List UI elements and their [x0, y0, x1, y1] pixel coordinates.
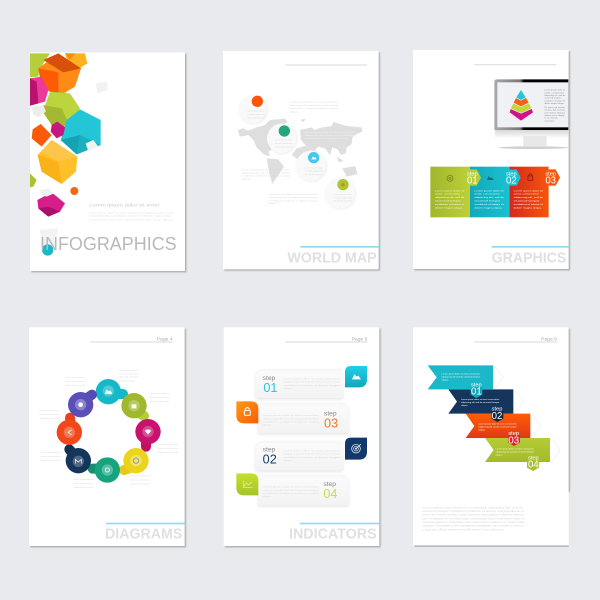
segment: lime — [121, 393, 147, 418]
illustration: colourful cubes — [30, 53, 107, 256]
chart: three step blocks — [430, 167, 560, 217]
icon: target — [345, 438, 367, 460]
text block: top note — [289, 101, 339, 113]
card: step 01: incididunt ut labore et dolore magna — [283, 384, 341, 387]
card: step 03: adipiscing elit sed do eiusmod tempor — [263, 417, 320, 420]
text block: cover intro: Lorem ipsum dolor sit amet, consectetur adipiscing elit sed do — [89, 211, 174, 214]
banner: step 02: Lorem ipsum dolor sit amet consectetur — [461, 398, 500, 401]
banner: step 01: 01 — [471, 386, 482, 397]
heading: lorem ipsum: Lorem ipsum dolor sit amet — [89, 203, 160, 209]
card: step 04: step — [323, 481, 336, 488]
panel: indicators — [224, 327, 381, 547]
card: step 04: 04 — [323, 487, 337, 501]
text block: page 6 paragraph: reprehenderit in voluptate velit esse cillum dolore eu fugiat nulla — [422, 520, 525, 524]
text block: map note: adipiscing elit sed do eiusmod tempor — [305, 134, 355, 137]
title: world map: WORLD MAP — [287, 250, 377, 266]
text block: top note: aliqua — [289, 111, 299, 113]
text block: monitor copy: veniam, quis nostrud — [544, 109, 565, 112]
text block: top note: Lorem ipsum dolor sit amet consectetur — [289, 101, 339, 104]
text block: monitor copy: Ut enim ad minim — [544, 106, 565, 109]
callout: orange marker: elit sed do eiusmod — [247, 116, 265, 119]
text block: diagram notes: amet consectetur — [39, 413, 60, 416]
text block: diagram notes: Lorem ipsum dolor sit — [130, 475, 150, 478]
text block: diagram notes: adipiscing elit sed do — [73, 486, 94, 489]
text block: monitor copy: ex ea commodo — [544, 118, 558, 120]
banner: step 03: adipiscing elit sed do eiusmod tempor — [478, 425, 517, 428]
text block: diagram notes: amet consectetur — [149, 396, 170, 399]
text block: page 6 paragraph: nisi ut aliquip ex ea commodo consequat. Duis aute irure dolor in — [422, 516, 525, 520]
banner: step 03: aliqua — [478, 429, 486, 431]
callout: lime marker: elit sed do eiusmod — [333, 200, 353, 203]
banner: step 04: aliqua — [496, 454, 503, 456]
text block: diagram notes — [39, 369, 179, 489]
text block: step 02 copy: dolore magna aliqua. — [474, 207, 503, 210]
segment: magenta — [135, 419, 161, 447]
card: step 02: incididunt ut labore et dolore magna — [283, 456, 341, 459]
icon: people — [345, 366, 367, 387]
text block: diagram notes: amet consectetur — [41, 455, 61, 458]
banner: step 04: adipiscing elit sed do eiusmod tempor — [496, 450, 534, 453]
title: graphics: GRAPHICS — [492, 250, 567, 266]
text block: monitor copy: Lorem ipsum dolor sit — [544, 89, 565, 92]
icon: chart — [236, 473, 258, 495]
banner: step 04 — [485, 438, 550, 471]
card: step 01: aliqua — [283, 388, 293, 390]
banner: step 03: 03 — [508, 435, 519, 446]
panel: diagrams — [29, 327, 186, 547]
chart: circular diagram — [57, 379, 161, 483]
chart: pyramid — [510, 90, 533, 121]
banner: step 04: 04 — [528, 460, 539, 471]
icon: lock — [528, 174, 533, 180]
text block: left note: aliqua — [241, 178, 251, 180]
text block: top note: adipiscing elit sed do eiusmod tempor — [289, 104, 339, 107]
segment: red — [57, 418, 82, 445]
text block: step 03 copy: adipiscing elit, sed do — [514, 196, 544, 199]
text block: diagram notes: adipiscing elit sed do — [149, 400, 170, 403]
card: step 02: 02 — [263, 453, 277, 467]
icon: lock — [236, 401, 258, 423]
text block: diagram notes: Lorem ipsum dolor sit — [119, 369, 139, 372]
callout: green marker: Lorem ipsum dolor — [275, 139, 293, 142]
segment: green — [93, 457, 120, 483]
text block: diagram notes: Lorem ipsum dolor sit — [39, 409, 60, 412]
text block: diagram notes: eiusmod tempor — [119, 380, 136, 383]
text block: step 01 copy: eiusmod tempor — [435, 199, 461, 202]
card: step 01: adipiscing elit sed do eiusmod tempor — [283, 381, 340, 384]
text block: diagram notes: Lorem ipsum dolor sit — [149, 392, 170, 395]
label: step 02: 02 — [506, 175, 517, 186]
card: step 01: 01 — [263, 381, 277, 395]
banner: step 02: 02 — [492, 411, 502, 422]
segment: teal — [96, 379, 123, 404]
title: diagrams: DIAGRAMS — [105, 526, 183, 542]
text block: diagram notes: adipiscing elit sed do — [39, 417, 60, 420]
text block: diagram notes: Lorem ipsum dolor sit — [41, 451, 61, 454]
card: step 02 — [256, 443, 344, 472]
banner: step 04: Lorem ipsum dolor sit amet consectetur — [496, 447, 534, 450]
panel: infographics cover — [30, 52, 186, 272]
text block: diagram notes: adipiscing elit sed do — [119, 376, 139, 379]
banner: step 01: step — [471, 382, 482, 388]
text block: step 02 copy: adipiscing elit, sed do — [474, 196, 505, 199]
callout: blue marker — [296, 151, 327, 181]
callout: lime marker — [325, 178, 356, 209]
callout: lime marker: Lorem ipsum dolor — [333, 193, 352, 196]
text block: left note: adipiscing elit sed do eiusmod tempor — [241, 172, 291, 175]
card: step 02: Lorem ipsum dolor sit amet consectetur — [283, 449, 340, 452]
card: step 03 — [258, 404, 348, 434]
banner: step 03: Lorem ipsum dolor sit amet consectetur — [478, 422, 517, 425]
illustration: desktop monitor with pyramid — [494, 79, 568, 149]
text block: page 6 paragraph: eiusmod tempor incididunt ut labore et dolore magna aliqua ut — [422, 509, 524, 513]
card: step 02: adipiscing elit sed do eiusmod tempor — [283, 453, 340, 456]
text block: monitor copy: consequat — [544, 119, 555, 122]
text block: diagram notes: Lorem ipsum dolor sit — [73, 478, 94, 481]
segment: navy — [66, 448, 91, 473]
callout: blue marker: elit sed do eiusmod — [304, 173, 324, 176]
text block: bottom note: Lorem ipsum dolor sit amet consectetur — [268, 193, 319, 196]
icon: target — [447, 175, 453, 181]
text block: step 03 copy: amet, consectetur — [514, 193, 539, 196]
text block: monitor copy: incididunt ut labore et — [544, 99, 565, 102]
text block: diagram notes: amet consectetur — [119, 372, 139, 375]
text block: page 6 paragraph: Lorem ipsum dolor sit amet, consectetur adipiscing elit, sed do — [422, 506, 524, 510]
text block: diagram notes: adipiscing elit sed do — [41, 459, 61, 462]
text block: step 01 copy: amet, consectetur — [435, 193, 461, 196]
icon: people — [487, 176, 494, 180]
callout: lime marker: sit amet adipiscing — [333, 196, 353, 199]
text block: left note: incididunt ut labore et dolore magna — [241, 175, 291, 178]
text block: top note: incididunt ut labore et dolore magna — [289, 107, 339, 110]
card: step 02: aliqua — [283, 460, 293, 462]
card: step 03: 03 — [324, 416, 338, 430]
text block: bottom note: aliqua — [268, 203, 278, 205]
text block: monitor copy: adipiscing elit, sed do — [544, 94, 566, 97]
panel: world map — [223, 51, 380, 271]
banner: step 02: step — [492, 407, 502, 413]
card: step 04: Lorem ipsum dolor sit amet consectetur — [263, 486, 320, 489]
card: step 03: incididunt ut labore et dolore magna — [263, 421, 321, 424]
text block: map note: Lorem ipsum dolor sit amet consectetur — [305, 131, 355, 134]
text block: step 02 copy: incididunt ut labore et — [474, 203, 504, 206]
text block: diagram notes: adipiscing elit sed do — [158, 451, 179, 454]
text block: step 01 copy: incididunt ut labore et — [435, 203, 465, 206]
card: step 03: step — [324, 411, 337, 418]
text block: monitor copy: dolore magna aliqua. — [544, 102, 565, 105]
callout: green marker — [267, 124, 297, 154]
callout: orange marker — [239, 95, 267, 124]
segment: yellow — [123, 448, 149, 473]
banner: step 01: Lorem ipsum dolor sit amet consectetur — [442, 372, 480, 375]
callout: green marker: elit sed do eiusmod — [275, 145, 293, 148]
banner: step 02: adipiscing elit sed do eiusmod tempor — [461, 401, 500, 404]
text block: monitor copy: exercitation ullamco — [544, 111, 566, 114]
banner: step 01 — [428, 365, 493, 398]
text block: diagram notes: Lorem ipsum dolor sit — [65, 376, 86, 379]
title: infographics: INFOGRAPHICS — [40, 233, 177, 254]
text block: step 03 copy — [514, 189, 544, 210]
label: page 6: Page 6 — [541, 336, 557, 341]
label: step 01: 01 — [467, 175, 478, 186]
text block: bottom note: adipiscing elit sed do eiusmod tempor — [268, 196, 319, 199]
panel: stepped banners — [413, 327, 570, 547]
text block: monitor copy: amet, consectetur — [544, 91, 565, 94]
card: step 01 — [256, 371, 344, 399]
segment: purple — [68, 392, 93, 417]
text block: diagram notes: amet consectetur — [65, 380, 86, 383]
text block: bottom note: incididunt ut labore et dolore magna — [268, 199, 319, 202]
text block: diagram notes: Lorem ipsum dolor sit — [158, 443, 178, 446]
label: step 03: step — [545, 171, 556, 177]
banner: step 02: aliqua — [461, 405, 469, 407]
card: step 04: aliqua — [263, 496, 273, 498]
callout: blue marker: sit amet adipiscing — [304, 170, 324, 173]
callout: green marker: sit amet adipiscing — [275, 142, 293, 145]
text block: diagram notes: amet consectetur — [73, 482, 94, 485]
text block: monitor copy: eiusmod tempor — [544, 97, 561, 100]
text block: step 01 copy — [435, 189, 465, 210]
text block: step 02 copy — [474, 189, 505, 210]
decorative chevrons — [495, 367, 560, 461]
text block: diagram notes: amet consectetur — [158, 447, 178, 450]
text block: step 03 copy: dolore magna aliqua. — [514, 207, 542, 210]
text block: diagram notes: amet consectetur — [130, 479, 150, 482]
card: step 04 — [258, 476, 348, 507]
text block: bottom note — [268, 193, 319, 205]
text block: monitor copy — [544, 89, 566, 122]
callout: blue marker: Lorem ipsum dolor — [304, 166, 323, 169]
chart: world map shapes — [238, 119, 362, 184]
label: page 4: Page 4 — [157, 336, 173, 341]
text block: monitor copy: laboris nisi ut aliquip — [544, 114, 565, 117]
text block: left note: Lorem ipsum dolor sit amet consectetur — [241, 169, 291, 172]
text block: step 01 copy: Lorem ipsum dolor sit — [435, 189, 465, 192]
banner: step 01: aliqua — [442, 379, 449, 381]
banner: step 03: step — [508, 431, 519, 437]
text block: page 6 paragraph: enim ad minim veniam, quis nostrud exercitation ullamco laboris — [422, 513, 525, 517]
label: page 5: Page 5 — [352, 336, 368, 341]
banner: step 01: adipiscing elit sed do eiusmod tempor — [442, 375, 480, 378]
card: step 03: Lorem ipsum dolor sit amet consectetur — [263, 414, 320, 417]
callout: orange marker: sit amet adipiscing — [247, 113, 265, 116]
banner: step 04: step — [528, 456, 539, 462]
text block: step 02 copy: Lorem ipsum dolor sit — [474, 189, 504, 192]
banner: step 02 — [448, 389, 513, 422]
text block: step 02 copy: eiusmod tempor — [474, 199, 501, 202]
text block: map note — [305, 131, 355, 140]
card: step 04: adipiscing elit sed do eiusmod tempor — [263, 489, 320, 492]
text block: cover intro — [89, 211, 175, 221]
text block: cover intro: eiusmod tempor incididunt ut labore et dolore magna aliqua — [89, 215, 173, 218]
label: step 02: step — [506, 171, 517, 177]
banner: step 03 — [466, 414, 530, 446]
callout: orange marker: Lorem ipsum dolor — [247, 110, 265, 113]
text block: page 6 paragraph: culpa qui officia deserunt mollit anim id est laborum. — [422, 528, 505, 532]
text block: page 6 paragraph — [422, 506, 525, 532]
text block: map note: incididunt ut labore et dolore — [305, 137, 350, 140]
text block: step 01 copy: dolore magna aliqua. — [435, 207, 464, 210]
text block: left note — [241, 169, 291, 180]
text block: diagram notes: adipiscing elit sed do — [130, 483, 151, 486]
text block: step 02 copy: amet, consectetur — [474, 193, 500, 196]
card: step 02: step — [263, 446, 276, 453]
text block: step 01 copy: adipiscing elit, sed do — [435, 196, 465, 199]
text block: step 03 copy: Lorem ipsum dolor sit — [514, 189, 544, 192]
label: step 01: step — [467, 171, 478, 177]
text block: step 03 copy: eiusmod tempor — [514, 199, 540, 202]
text block: step 03 copy: incididunt ut labore et — [514, 203, 544, 206]
panel: graphics — [413, 50, 570, 270]
text block: page 6 paragraph: pariatur. Excepteur sint occaecat cupidatat non proident, sunt in — [422, 524, 525, 528]
text block: cover intro: Ut enim ad minim veniam quis nostrud exercitation ullamco — [89, 218, 175, 221]
card: step 04: incididunt ut labore et dolore magna — [263, 492, 321, 495]
card: step 01: Lorem ipsum dolor sit amet consectetur — [283, 377, 340, 380]
card: step 01: step — [263, 375, 276, 382]
label: step 03: 03 — [545, 175, 556, 186]
title: indicators: INDICATORS — [289, 526, 377, 542]
card: step 03: aliqua — [263, 425, 273, 427]
text block: diagram notes: adipiscing elit sed do — [65, 384, 86, 387]
